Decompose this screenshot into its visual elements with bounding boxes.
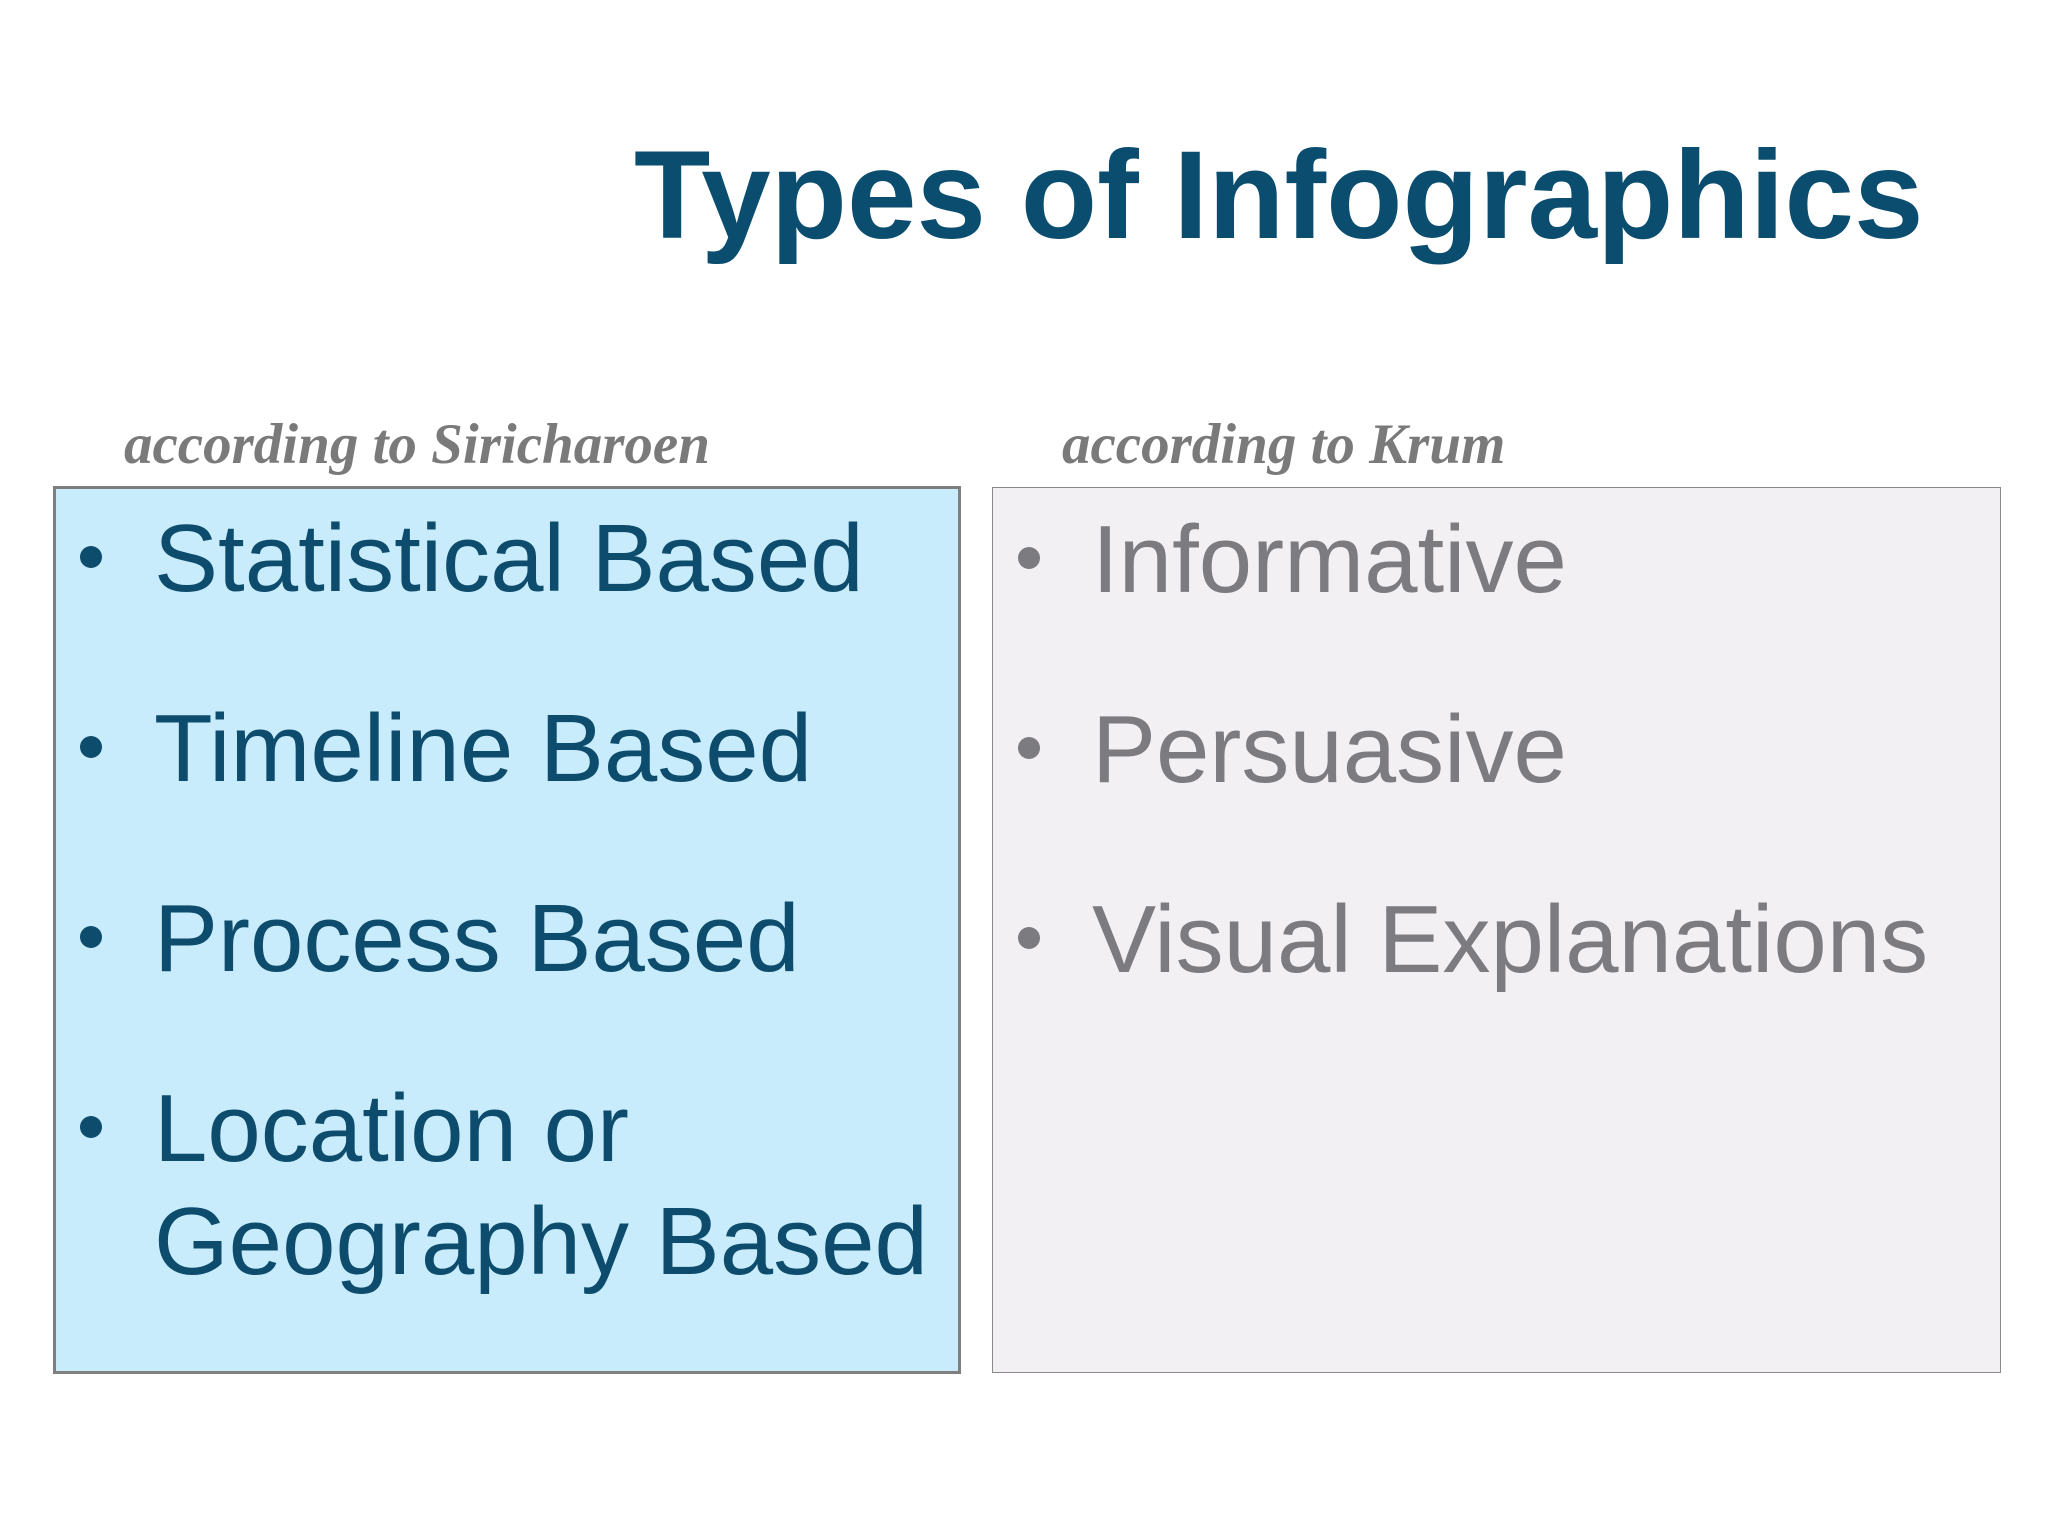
item: Persuasive: Persuasive — [1092, 696, 1567, 803]
subtitle: Krum: according to Krum — [1062, 413, 1505, 476]
title: Types of Infographics — [634, 126, 1924, 265]
item: Informative: Informative — [1092, 506, 1567, 613]
panel: Krum types — [992, 487, 2001, 1373]
item: Timeline Based: Timeline Based — [154, 695, 812, 802]
item: Location or Geography Based: Geography Based — [154, 1188, 928, 1295]
panel: Siricharoen types — [53, 486, 961, 1374]
item: Statistical Based: Statistical Based — [154, 505, 864, 612]
item: Location or Geography Based — [80, 1075, 928, 1295]
subtitle: Siricharoen: according to Siricharoen — [124, 413, 710, 476]
item: Location or Geography Based: Location or — [154, 1075, 629, 1182]
item: Process Based: Process Based — [154, 885, 800, 992]
item: Visual Explanations: Visual Explanations — [1092, 886, 1928, 993]
